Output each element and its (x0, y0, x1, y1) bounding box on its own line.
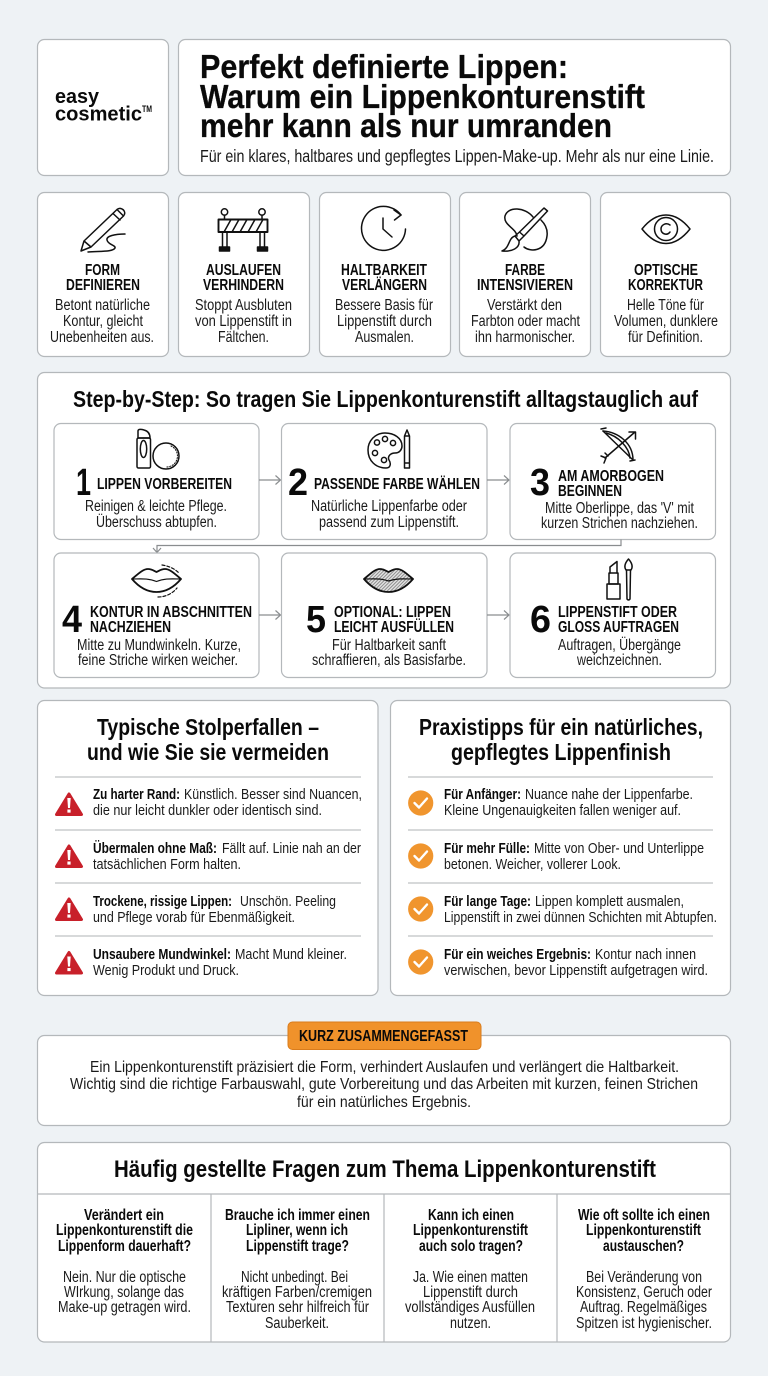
summary text: Ein Lippenkonturenstift präzisiert die Form, verhindert Auslaufen und verlängert die Haltbarkeit. (90, 1059, 679, 1076)
FAQ 4: Auftrag. Regelmäßiges (580, 1299, 707, 1316)
tips heading (419, 714, 703, 765)
step 6: LIPPENSTIFT ODER (558, 604, 677, 621)
title panel (178, 40, 730, 176)
pitfall 3: und Pflege vorab für Ebenmäßigkeit. (93, 909, 295, 926)
icon: pencil (81, 208, 125, 252)
step 3: Mitte Oberlippe, das 'V' mit (545, 500, 695, 517)
step 5: OPTIONAL: LIPPEN (334, 604, 451, 621)
logo card: cosmetic (55, 104, 142, 126)
panel: Auslaufen verhindern: Stoppt Ausbluten (195, 297, 292, 314)
step 6 (510, 553, 716, 678)
tip 4: verwischen, bevor Lippenstift aufgetragen wird. (444, 962, 708, 979)
logo card: easy (55, 86, 100, 108)
summary text: Wichtig sind die richtige Farbauswahl, gute Vorbereitung und das Arbeiten mit kurzen, feinen Strichen (70, 1076, 698, 1093)
panel: Form definieren: Betont natürliche (55, 297, 150, 314)
step 3: BEGINNEN (558, 483, 622, 500)
pitfall 2: tatsächlichen Form halten. (93, 856, 241, 873)
panel: Haltbarkeit verlängern (320, 192, 450, 356)
panel: Auslaufen verhindern: AUSLAUFEN (206, 262, 281, 279)
panel: Farbe intensivieren: Verstärkt den (487, 297, 562, 314)
panel: Farbe intensivieren: Farbton oder macht (471, 313, 581, 330)
logo card: TM (142, 104, 152, 114)
icon: barrier (218, 209, 268, 251)
step 4: NACHZIEHEN (90, 619, 171, 636)
tip 4: Für ein weiches Ergebnis: (444, 946, 591, 963)
step 1 (54, 424, 259, 540)
FAQ 3: vollständiges Ausfüllen (405, 1299, 535, 1316)
icon: eye (642, 215, 690, 244)
FAQ 3 (405, 1207, 535, 1332)
tip 1: Für Anfänger: (444, 786, 521, 803)
arrow (487, 476, 509, 484)
panel: Optische Korrektur: OPTISCHE (634, 262, 698, 279)
panel: Form definieren: Kontur, gleicht (63, 313, 144, 330)
pitfalls heading (87, 714, 329, 765)
panel: Haltbarkeit verlängern: VERLÄNGERN (342, 277, 427, 294)
step 1: Überschuss abtupfen. (96, 513, 217, 531)
step 4: KONTUR IN ABSCHNITTEN (90, 604, 252, 621)
title: Perfekt definierte Lippen: (200, 49, 568, 86)
pitfalls heading: und wie Sie sie vermeiden (87, 739, 329, 765)
connector arrow (153, 540, 621, 552)
title: Warum ein Lippenkonturenstift (200, 79, 645, 116)
step 5: Für Haltbarkeit sanft (332, 637, 447, 654)
arrow (259, 610, 280, 620)
summary text: für ein natürliches Ergebnis. (297, 1094, 471, 1111)
panel: Optische Korrektur: Helle Töne für (627, 297, 704, 314)
pitfall 1: Zu harter Rand: (93, 786, 180, 803)
panel: Farbe intensivieren: INTENSIVIEREN (477, 277, 573, 294)
icon: colour palette and pencil (368, 430, 410, 468)
pitfall 4: Wenig Produkt und Druck. (93, 962, 239, 979)
FAQ 4: Lippenkonturenstift (586, 1222, 701, 1239)
panel: Auslaufen verhindern: Fältchen. (218, 329, 269, 346)
tip 2: betonen. Weicher, vollerer Look. (444, 856, 621, 873)
panel: Optische Korrektur: für Definition. (628, 329, 703, 346)
arrow (259, 476, 280, 484)
FAQ 3: Kann ich einen (428, 1207, 514, 1224)
panel: Farbe intensivieren: ihn harmonischer. (475, 329, 575, 346)
step 6: 6 (530, 599, 551, 641)
tip 2 (408, 840, 704, 873)
step 2: PASSENDE FARBE WÄHLEN (314, 475, 480, 493)
panel: pitfalls (38, 700, 378, 996)
FAQ 2: Lippenstift trage? (246, 1238, 349, 1255)
pitfall 2: Übermalen ohne Maß: (93, 840, 217, 857)
step 2: 2 (288, 462, 308, 504)
FAQ 4: austauschen? (603, 1238, 684, 1255)
pitfall 1: die nur leicht dunkler oder identisch sind. (93, 802, 322, 819)
step 1: Reinigen & leichte Pflege. (85, 498, 227, 515)
pitfall 1 (56, 786, 362, 819)
FAQ 4 (576, 1207, 712, 1332)
pitfall 3: Trockene, rissige Lippen: (93, 893, 232, 910)
summary badge: KURZ ZUSAMMENGEFASST (299, 1028, 468, 1045)
FAQ 1: Make-up getragen wird. (58, 1299, 191, 1316)
panel: Haltbarkeit verlängern: HALTBARKEIT (341, 262, 427, 279)
panel: Form definieren (38, 192, 168, 356)
step 4: feine Striche wirken weicher. (78, 652, 238, 669)
title (200, 49, 645, 145)
icon: lip balm and compact (137, 429, 179, 469)
arrow (487, 610, 509, 620)
step 1: LIPPEN VORBEREITEN (97, 476, 232, 493)
icon: clock with arrow (362, 206, 406, 250)
step 3 (510, 424, 716, 540)
tip 2: Mitte von Ober- und Unterlippe (534, 840, 704, 857)
FAQ 4: Spitzen ist hygienischer. (576, 1315, 712, 1332)
icon: lipstick and brush (607, 559, 632, 600)
pitfall 2: Fällt auf. Linie nah an der (222, 840, 361, 857)
step 1: 1 (76, 462, 91, 504)
step 5: LEICHT AUSFÜLLEN (334, 617, 454, 636)
pitfall 2 (56, 840, 361, 873)
tip 3: Lippen komplett ausmalen, (535, 893, 684, 910)
panel: Form definieren: DEFINIEREN (66, 277, 140, 294)
summary badge (288, 1022, 481, 1050)
FAQ 3: nutzen. (450, 1315, 491, 1332)
panel: Auslaufen verhindern: von Lippenstift in (195, 313, 292, 330)
panel: Farbe intensivieren: FARBE (505, 262, 545, 279)
step 5: 5 (306, 599, 326, 641)
title: mehr kann als nur umranden (200, 108, 612, 145)
step 4: 4 (62, 599, 82, 641)
FAQ 3: auch solo tragen? (419, 1238, 523, 1255)
FAQ 1: Nein. Nur die optische (63, 1269, 186, 1286)
panel: Optische Korrektur: Volumen, dunklere (614, 313, 718, 330)
panel: tips (390, 700, 730, 996)
tip 4: Kontur nach innen (595, 946, 696, 963)
icon: hatched lips (364, 569, 413, 592)
summary text (70, 1059, 698, 1111)
FAQ 4: Konsistenz, Geruch oder (576, 1284, 712, 1301)
FAQ 2: Brauche ich immer einen (225, 1207, 370, 1224)
pitfall 3 (56, 893, 336, 926)
step 3: kurzen Strichen nachziehen. (541, 515, 698, 532)
FAQ heading: Häufig gestellte Fragen zum Thema Lippenkonturenstift (114, 1156, 656, 1183)
tip 4 (408, 946, 708, 979)
tip 3 (408, 893, 717, 926)
step 3: 3 (530, 462, 550, 504)
FAQ 2: kräftigen Farben/cremigen (222, 1284, 372, 1301)
icon: lips with dashed contour (132, 565, 181, 597)
logo card (38, 40, 168, 176)
panel: Farbe intensivieren (460, 192, 590, 356)
tip 3: Für lange Tage: (444, 893, 531, 910)
FAQ 1: Lippenform dauerhaft? (58, 1238, 191, 1255)
panel: Optische Korrektur (600, 192, 730, 356)
FAQ 4: Bei Veränderung von (586, 1269, 702, 1286)
step 3: AM AMORBOGEN (558, 468, 664, 485)
FAQ 4: Wie oft sollte ich einen (578, 1207, 710, 1224)
FAQ 2: Lipliner, wenn ich (246, 1222, 348, 1239)
FAQ 3: Lippenstift durch (423, 1284, 518, 1301)
pitfall 3: Unschön. Peeling (240, 893, 336, 910)
panel: Haltbarkeit verlängern: Ausmalen. (355, 329, 414, 346)
tip 1: Nuance nahe der Lippenfarbe. (525, 786, 693, 803)
panel: Auslaufen verhindern (178, 192, 310, 356)
pitfall 4 (56, 946, 347, 979)
icon: bow and arrow (601, 428, 636, 463)
step 5 (282, 553, 487, 678)
step 6: weichzeichnen. (576, 652, 662, 669)
panel: steps (38, 372, 730, 688)
step 2 (282, 424, 487, 540)
step 5: schraffieren, als Basisfarbe. (312, 652, 466, 669)
tip 2: Für mehr Fülle: (444, 840, 530, 857)
FAQ 1 (56, 1207, 193, 1316)
FAQ 2: Sauberkeit. (265, 1315, 329, 1332)
tip 1 (408, 786, 693, 819)
FAQ 2 (222, 1207, 372, 1332)
panel: summary (38, 1022, 730, 1126)
panel: Haltbarkeit verlängern: Bessere Basis für (335, 297, 433, 314)
FAQ 1: Verändert ein (84, 1207, 164, 1224)
FAQ 3: Ja. Wie einen matten (413, 1269, 528, 1286)
pitfalls heading: Typische Stolperfallen – (97, 714, 319, 740)
panel: Haltbarkeit verlängern: Lippenstift durch (337, 313, 432, 330)
panel: FAQ (38, 1142, 730, 1342)
panel: Form definieren: Unebenheiten aus. (50, 329, 154, 346)
icon: palette with brush (502, 208, 548, 251)
pitfall 1: Künstlich. Besser sind Nuancen, (184, 786, 362, 803)
panel: Optische Korrektur: KORREKTUR (628, 277, 703, 294)
FAQ 2: Nicht unbedingt. Bei (241, 1269, 348, 1286)
panel: Auslaufen verhindern: VERHINDERN (203, 277, 284, 294)
step 2: passend zum Lippenstift. (319, 514, 459, 531)
tips heading: gepflegtes Lippenfinish (451, 739, 671, 765)
panel: Form definieren: FORM (85, 262, 120, 279)
FAQ 2: Texturen sehr hilfreich für (226, 1299, 369, 1316)
tips heading: Praxistipps für ein natürliches, (419, 714, 703, 740)
step 4: Mitte zu Mundwinkeln. Kurze, (77, 637, 241, 654)
FAQ 3: Lippenkonturenstift (413, 1222, 528, 1239)
tip 1: Kleine Ungenauigkeiten fallen weniger auf. (444, 802, 681, 819)
step 6: Auftragen, Übergänge (558, 636, 681, 654)
step 4 (54, 553, 259, 678)
FAQ 1: WIrkung, solange das (64, 1284, 184, 1301)
step 6: GLOSS AUFTRAGEN (558, 619, 679, 636)
FAQ 1: Lippenkonturenstift die (56, 1222, 193, 1239)
pitfall 4: Unsaubere Mundwinkel: (93, 946, 231, 963)
pitfall 4: Macht Mund kleiner. (235, 946, 347, 963)
step 2: Natürliche Lippenfarbe oder (311, 498, 467, 515)
